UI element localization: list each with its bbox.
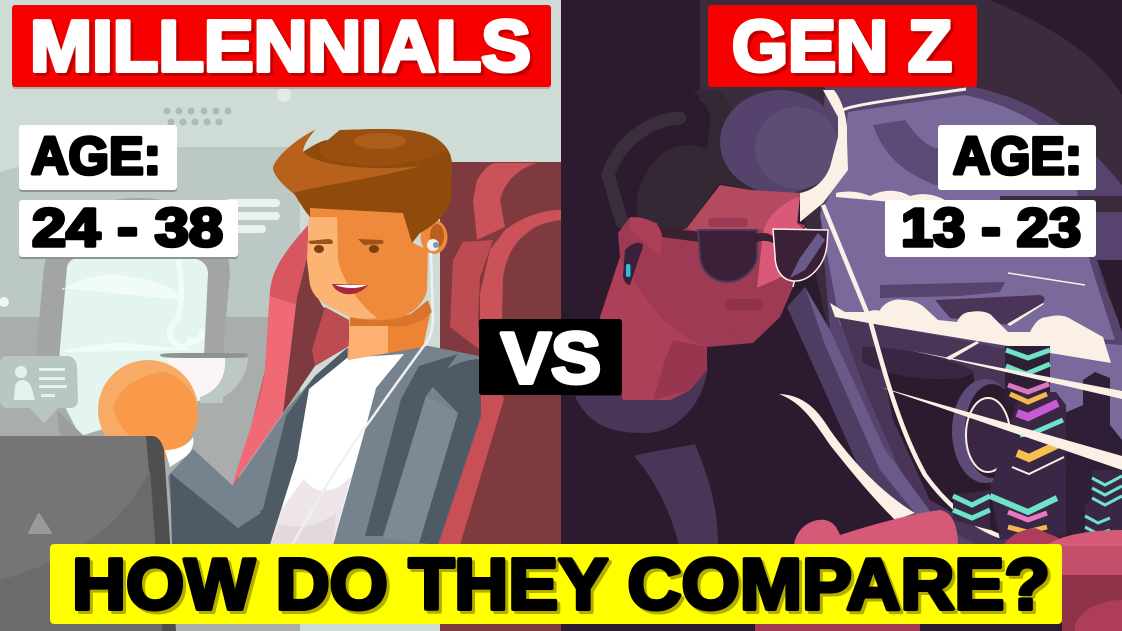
wireless earbud: [623, 243, 643, 285]
turbine engine: [952, 379, 1019, 483]
cloud lines: [830, 191, 1111, 363]
steering wheel: [575, 366, 718, 545]
panel: millennials airplane cabin: [0, 0, 561, 631]
dot cluster: [164, 108, 232, 126]
gloved hands on controls: [755, 510, 1122, 631]
faint headrest ring: [608, 118, 680, 222]
man: head with hair and face: [273, 129, 452, 360]
hair: [637, 90, 770, 230]
curved cream highlight: [779, 394, 915, 520]
versus badge: [479, 319, 622, 399]
versus badge: VS: [501, 319, 601, 399]
window view with sky: [820, 85, 1122, 560]
man: torso and jacket: [168, 346, 481, 545]
chat bubble with profile icon: [0, 356, 78, 423]
label: gen z: GEN Z: [732, 7, 952, 87]
coffee cup: [160, 353, 248, 403]
head and neck: [600, 185, 806, 400]
label: millennials age range: 24 - 38: [32, 198, 223, 258]
banner: how do they compare: HOW DO THEY COMPARE?: [72, 545, 1050, 625]
purple dashboard pillar and engine: [787, 287, 1122, 560]
seat: [233, 162, 561, 631]
label: gen z age heading: AGE:: [953, 127, 1082, 186]
hand holding cup: [98, 360, 198, 467]
sunglasses: [662, 228, 828, 282]
label: millennials age heading: AGE:: [31, 127, 161, 186]
pillar cream lines: [800, 89, 1085, 538]
earbud and wire: [292, 239, 439, 545]
airplane window: [35, 198, 230, 436]
headrest bun: [720, 90, 840, 194]
neon skyscrapers: [953, 346, 1122, 540]
speed streaks over city: [880, 303, 1122, 470]
panel: gen z cockpit: [561, 0, 1122, 631]
speed lines: [225, 199, 280, 233]
label: millennials: MILLENNIALS: [30, 7, 531, 87]
laptop: [0, 436, 176, 631]
label: gen z age range: 13 - 23: [901, 198, 1081, 258]
